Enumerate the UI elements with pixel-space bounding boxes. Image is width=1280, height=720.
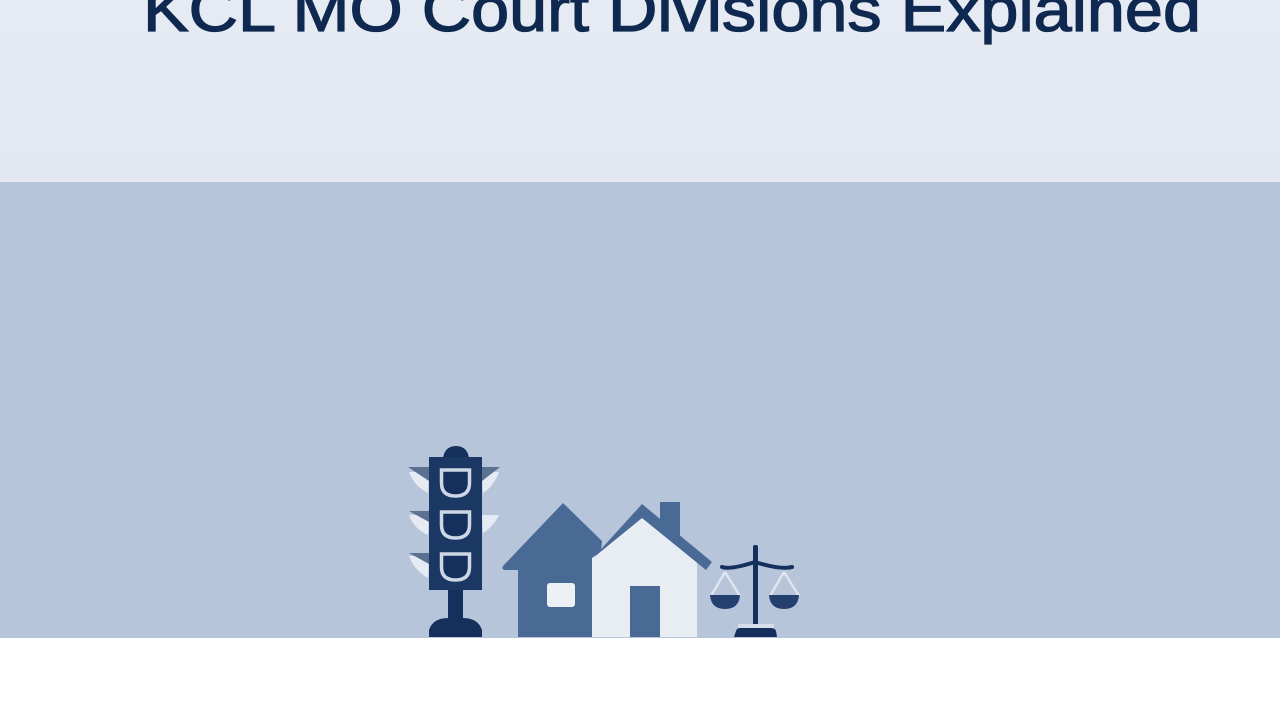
chimney <box>660 502 680 538</box>
scale base highlight <box>738 624 774 629</box>
traffic light lamps <box>442 470 470 580</box>
house door <box>630 586 660 637</box>
traffic light housing <box>429 457 482 590</box>
white house <box>592 518 697 637</box>
icon: scales of justice <box>710 545 799 637</box>
house window <box>547 583 575 607</box>
icon: houses <box>502 502 712 637</box>
scale beam <box>722 562 792 568</box>
traffic light white visors <box>409 472 499 578</box>
traffic light pole and base <box>429 585 482 637</box>
traffic light cap <box>443 446 469 458</box>
scale base <box>734 628 777 637</box>
scale pole <box>753 545 758 625</box>
panel: illustration band <box>0 182 1280 638</box>
panel: bottom white band <box>0 638 1280 720</box>
traffic light dark visors <box>408 467 500 564</box>
scale pans <box>710 595 799 609</box>
white house roof <box>593 504 712 570</box>
panel: header band <box>0 0 1280 182</box>
scale strings <box>711 572 799 596</box>
icon: traffic light <box>408 446 500 637</box>
blue house <box>502 503 602 637</box>
